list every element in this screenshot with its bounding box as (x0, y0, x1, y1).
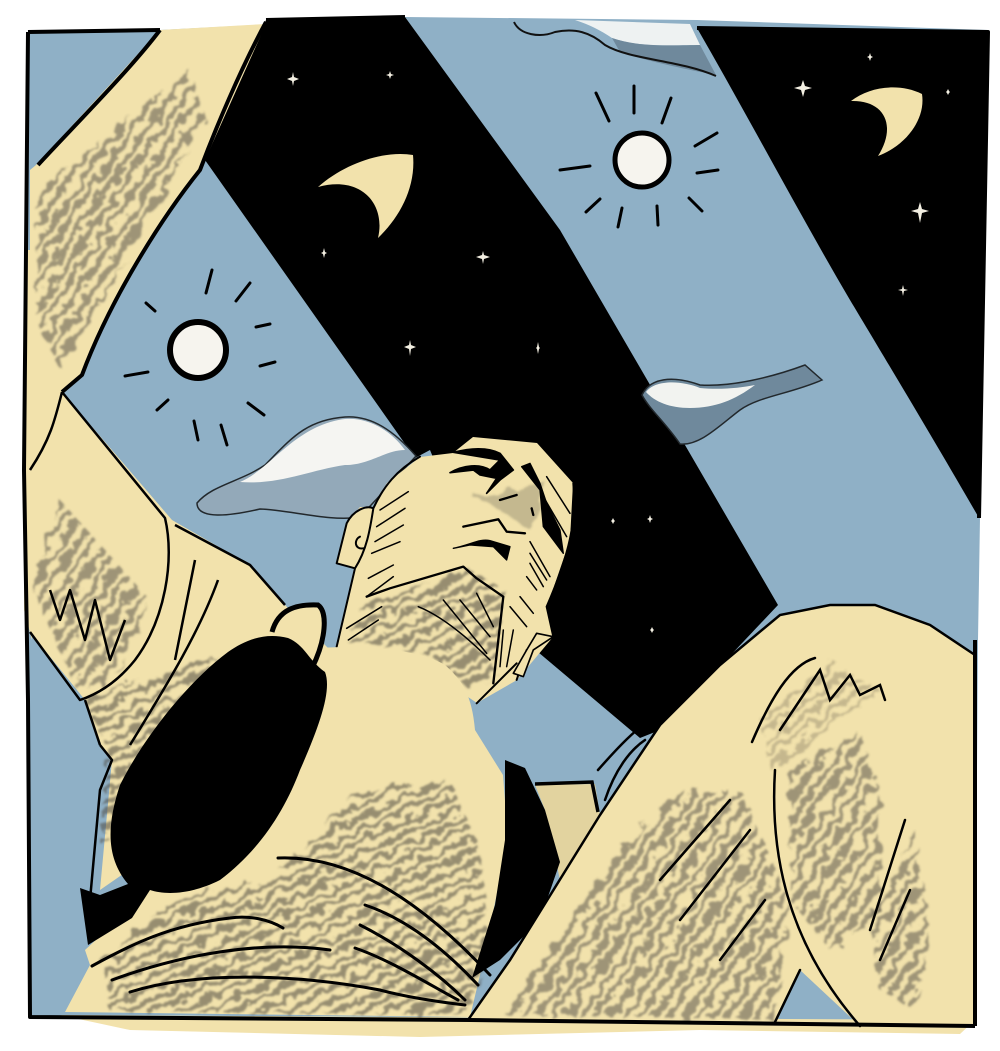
moon left (318, 154, 413, 238)
leg hatching (500, 660, 930, 1020)
head outline (337, 457, 574, 703)
moon right (851, 87, 922, 156)
jaw (367, 567, 503, 683)
face line work (337, 449, 574, 703)
near leg (468, 605, 975, 1026)
arm outline (30, 392, 285, 900)
black night band right (697, 28, 988, 518)
backpack handle (272, 605, 324, 668)
backpack (80, 636, 327, 945)
side hatching (347, 477, 570, 667)
sun right (560, 86, 718, 227)
arm hatching (32, 70, 240, 850)
eye right (522, 463, 563, 553)
stars (287, 53, 950, 633)
cream paint bleed (24, 250, 975, 1037)
torso folds (92, 858, 490, 1005)
mouth (453, 540, 510, 560)
cloud right (642, 365, 822, 444)
ear lobe (513, 633, 553, 677)
black night band centre (205, 17, 778, 738)
nose (463, 495, 533, 533)
leg outlines (468, 605, 975, 1026)
sun left (125, 270, 275, 445)
cloud left (197, 417, 416, 518)
cloud top (514, 20, 716, 76)
neck and head (337, 437, 573, 703)
arm top outline (38, 22, 266, 392)
torso hatching (100, 780, 490, 1015)
torso (65, 647, 508, 1017)
raised arm (30, 24, 330, 890)
brow and eyes (450, 449, 513, 493)
far leg patch (535, 784, 600, 880)
far leg outline (535, 782, 598, 812)
strap right (472, 760, 560, 978)
neck hatching (345, 480, 545, 690)
